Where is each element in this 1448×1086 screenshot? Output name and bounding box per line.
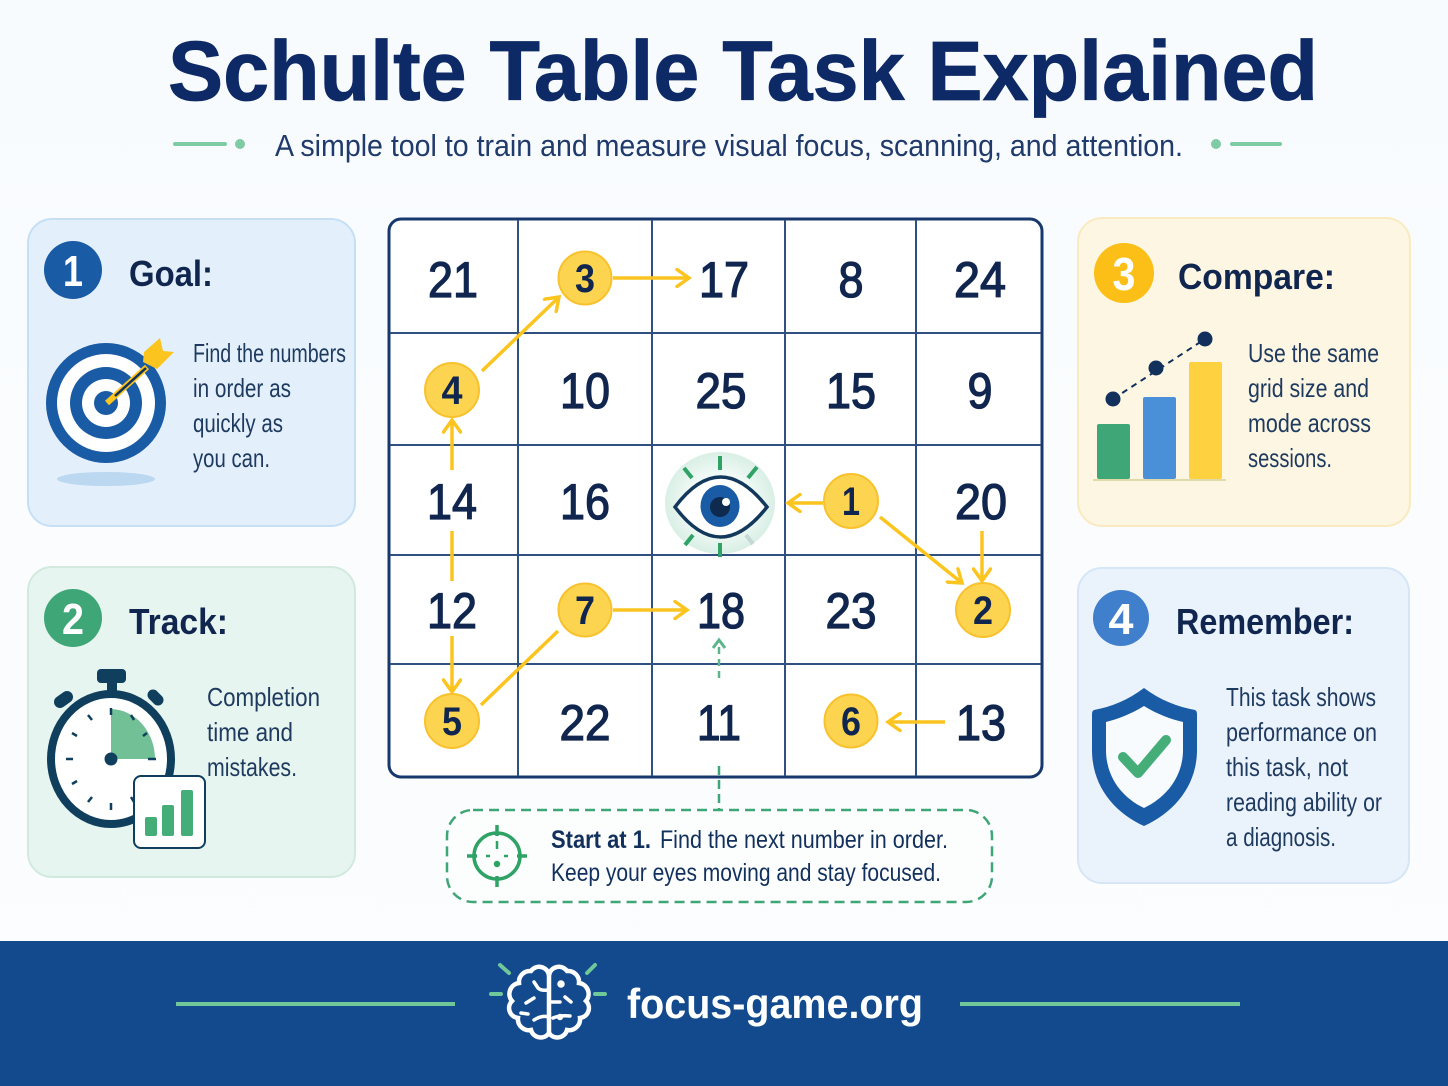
text: goal xyxy=(193,338,346,473)
numbers: 15 xyxy=(826,363,876,419)
heading: remember: Remember: xyxy=(1176,601,1354,642)
site name: focus-game.org xyxy=(627,980,923,1027)
eye icon xyxy=(665,452,775,557)
panel: remember xyxy=(1078,568,1409,883)
text: remember: a diagnosis. xyxy=(1226,822,1336,852)
icon: bar chart xyxy=(1093,332,1226,480)
callout text xyxy=(551,826,948,887)
text: remember: reading ability or xyxy=(1226,787,1382,817)
text: track: time and xyxy=(207,717,293,747)
text: goal: in order as xyxy=(193,373,291,403)
numbers: 24 xyxy=(954,252,1006,308)
subtitle: A simple tool to train and measure visual focus, scanning, and attention. xyxy=(275,128,1183,163)
schulte grid: 5 xyxy=(442,700,462,744)
text: compare: Use the same xyxy=(1248,338,1379,368)
badge 4: 4 xyxy=(1108,595,1134,644)
badge 2 xyxy=(44,589,102,647)
numbers: 21 xyxy=(428,252,478,308)
title: Schulte Table Task Explained xyxy=(168,24,1318,118)
text: goal: Find the numbers xyxy=(193,338,346,368)
text: compare: grid size and xyxy=(1248,373,1369,403)
badge 1 xyxy=(44,241,102,299)
text: track: Completion xyxy=(207,682,320,712)
schulte grid: 1 xyxy=(842,480,860,524)
numbers: 25 xyxy=(696,363,746,419)
schulte grid: 7 xyxy=(575,589,595,633)
text: remember: this task, not xyxy=(1226,752,1349,782)
schulte grid: 4 xyxy=(442,369,463,413)
badge 2: 2 xyxy=(62,595,84,644)
schulte grid xyxy=(389,219,1042,810)
badge 1: 1 xyxy=(63,247,83,296)
dashed green arrow xyxy=(718,640,720,810)
panel: goal xyxy=(28,219,355,526)
callout text: Find the next number in order. xyxy=(660,826,948,854)
badge 3 xyxy=(1094,243,1154,303)
text: remember: This task shows xyxy=(1226,682,1376,712)
icon: brain xyxy=(491,965,605,1037)
panel: compare xyxy=(1078,218,1410,526)
text: remember xyxy=(1226,682,1382,852)
text: goal: you can. xyxy=(193,443,270,473)
icon: shield xyxy=(1092,688,1197,826)
numbers: 23 xyxy=(826,583,876,639)
heading: track: Track: xyxy=(129,601,228,642)
numbers: 9 xyxy=(968,363,992,419)
numbers: 16 xyxy=(560,474,610,530)
numbers: 17 xyxy=(699,252,749,308)
arrows xyxy=(452,278,982,722)
text: goal: quickly as xyxy=(193,408,283,438)
schulte grid: 6 xyxy=(841,700,861,744)
numbers: 13 xyxy=(956,695,1006,751)
text: track xyxy=(207,682,320,782)
schulte grid: 3 xyxy=(575,257,595,301)
footer band xyxy=(0,941,1448,1086)
numbers: 11 xyxy=(697,695,741,751)
text: compare: sessions. xyxy=(1248,443,1332,473)
heading: compare: Compare: xyxy=(1178,256,1335,297)
badge 4 xyxy=(1093,590,1149,646)
callout text: Keep your eyes moving and stay focused. xyxy=(551,859,941,887)
numbers: 22 xyxy=(560,695,610,751)
numbers xyxy=(427,252,1007,751)
panel: track xyxy=(28,567,355,877)
text: remember: performance on xyxy=(1226,717,1377,747)
schulte grid: 2 xyxy=(973,589,993,633)
icon: crosshair xyxy=(467,825,527,887)
numbers: 12 xyxy=(427,583,477,639)
numbers: 10 xyxy=(560,363,610,419)
highlighted numbers xyxy=(425,252,1010,748)
numbers: 14 xyxy=(427,474,477,530)
icon: stopwatch xyxy=(51,669,205,848)
text: compare xyxy=(1248,338,1379,473)
callout: start xyxy=(447,810,992,902)
heading: goal: Goal: xyxy=(129,253,213,294)
callout text: Start at 1. xyxy=(551,826,651,854)
icon: target xyxy=(46,338,174,486)
text: compare: mode across xyxy=(1248,408,1371,438)
numbers: 20 xyxy=(955,474,1007,530)
badge 3: 3 xyxy=(1112,248,1136,300)
numbers: 8 xyxy=(838,252,864,308)
text: track: mistakes. xyxy=(207,752,297,782)
numbers: 18 xyxy=(697,583,745,639)
